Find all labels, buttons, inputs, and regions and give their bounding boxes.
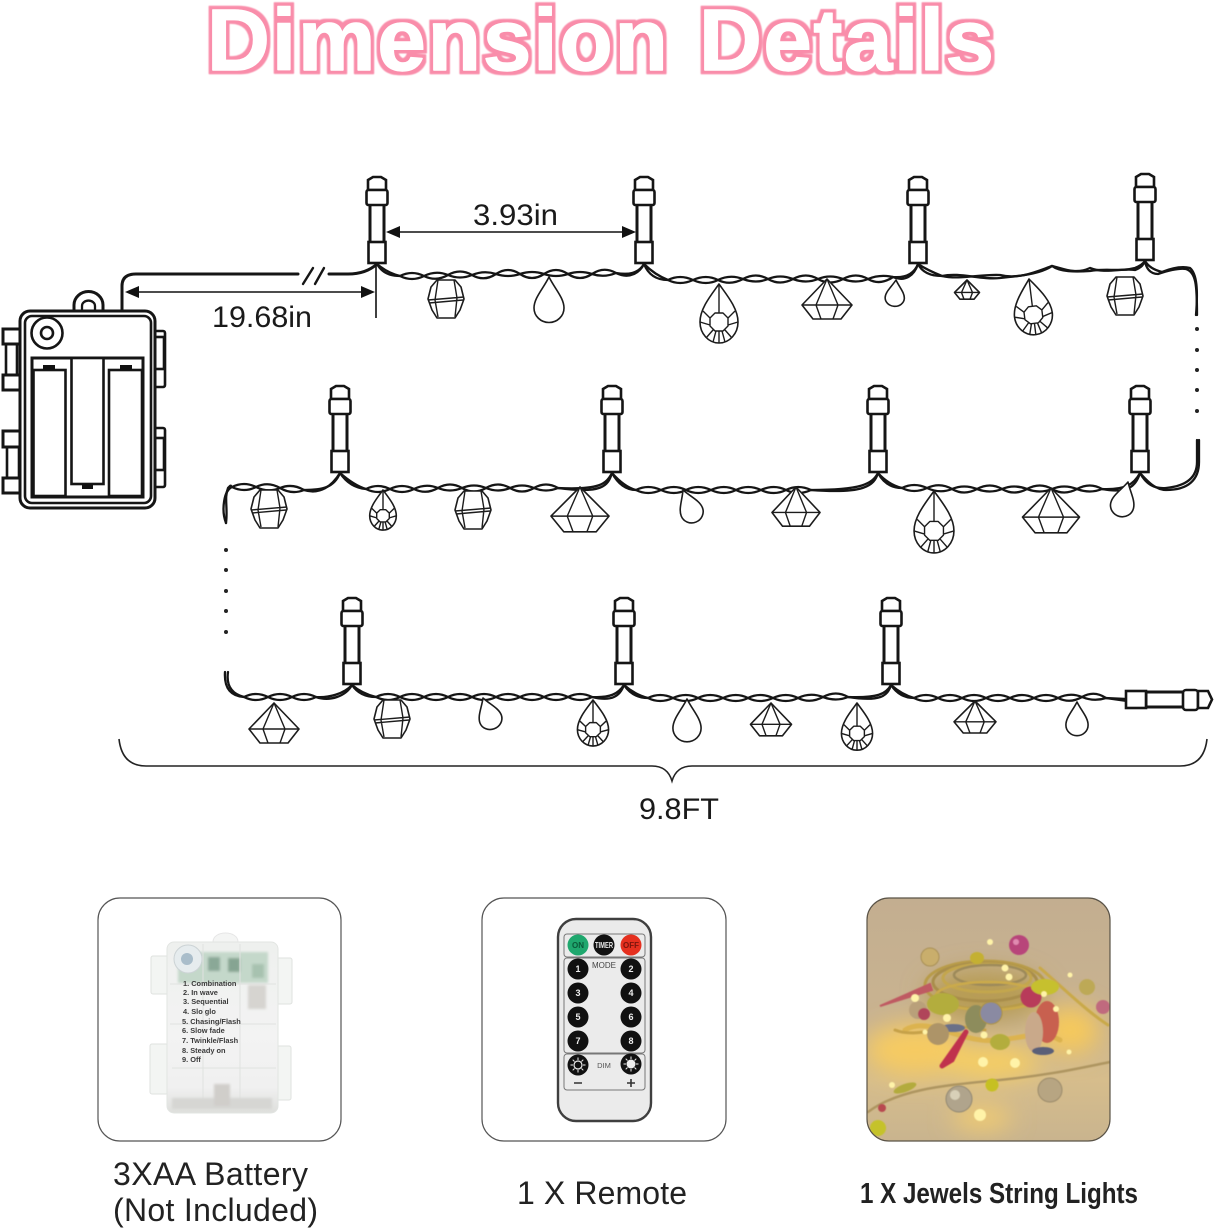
number buttons: 5: [575, 1012, 581, 1022]
number buttons: 4: [628, 988, 634, 998]
panel: remote: [482, 898, 726, 1141]
dimension: 19.68in: 19.68in: [212, 301, 312, 334]
twisted wire: [377, 261, 1197, 315]
bright LEDs: [889, 939, 1072, 1121]
jewels: [428, 277, 1143, 343]
twisted wire: [225, 672, 1127, 701]
case body: [20, 311, 155, 508]
right clips: [152, 331, 165, 487]
panel: jewels string lights photo: [865, 898, 1110, 1141]
continuation dots right: [1195, 327, 1199, 413]
on timer off buttons: TIMER: [595, 941, 613, 950]
dimension: 3.93in: [386, 199, 636, 238]
twisted wire: [224, 440, 1197, 523]
number buttons: 6: [628, 1012, 634, 1022]
lead wire with break mark: [122, 264, 377, 311]
mode list: 1. Combination: [183, 979, 237, 988]
remote control: MODE: [592, 961, 616, 970]
mode list: 8. Steady on: [182, 1046, 226, 1055]
mode list: 9. Off: [182, 1055, 201, 1064]
number buttons: 1: [575, 964, 581, 974]
dimension brace: 9.8FT: [119, 739, 1207, 826]
battery compartment: [32, 358, 143, 497]
number buttons: 2: [628, 964, 634, 974]
mode list: 2. In wave: [183, 988, 218, 997]
on timer off buttons: OFF: [623, 941, 639, 950]
caption: battery: (Not Included): [113, 1192, 318, 1228]
dim buttons: [568, 1054, 642, 1087]
caption: battery: [113, 1156, 318, 1228]
power switch: [32, 318, 62, 348]
circuit board: [178, 952, 268, 983]
mode list: 3. Sequential: [183, 997, 229, 1006]
warm glow: [865, 969, 1100, 1130]
caption: remote: 1 X Remote: [517, 1175, 687, 1211]
number buttons: [568, 958, 642, 1052]
mode list: 7. Twinkle/Flash: [182, 1036, 239, 1045]
end bulb: [1126, 690, 1212, 710]
bulbs: [366, 174, 1156, 263]
panel: battery: [98, 898, 341, 1141]
left clips: [3, 329, 24, 493]
dimension: 19.68in: [125, 264, 376, 334]
mode list: [182, 979, 241, 1064]
dimension: 3.93in: 3.93in: [473, 199, 558, 232]
caption: jewels string lights: 1 X Jewels String Lights: [860, 1178, 1138, 1210]
light string row 2: [224, 386, 1199, 553]
hanging hook: [74, 292, 103, 311]
wire coil: [868, 961, 1110, 1112]
mode list: 5. Chasing/Flash: [182, 1017, 241, 1026]
continuation dots left: [224, 548, 228, 634]
dimension brace: 9.8FT: 9.8FT: [639, 793, 719, 826]
photo: translucent battery box: [150, 933, 292, 1113]
icon: battery box: [3, 292, 165, 508]
on timer off buttons: [568, 934, 642, 956]
bulbs: [342, 598, 902, 684]
light string row 1: [366, 174, 1197, 343]
jewels: [249, 694, 1088, 750]
number buttons: 7: [575, 1036, 581, 1046]
beads and gems: [870, 935, 1110, 1136]
jewels: [251, 479, 1139, 553]
dim buttons: DIM: [597, 1061, 611, 1070]
caption: battery: 3XAA Battery: [113, 1156, 308, 1192]
mode list: 4. Slo glo: [183, 1007, 216, 1016]
bulbs: [330, 386, 1150, 472]
light string row 3: [225, 598, 1212, 750]
mode list: 6. Slow fade: [182, 1026, 225, 1035]
number buttons: 8: [628, 1036, 634, 1046]
remote control: [558, 919, 651, 1121]
on timer off buttons: ON: [572, 941, 584, 950]
number buttons: 3: [575, 988, 581, 998]
